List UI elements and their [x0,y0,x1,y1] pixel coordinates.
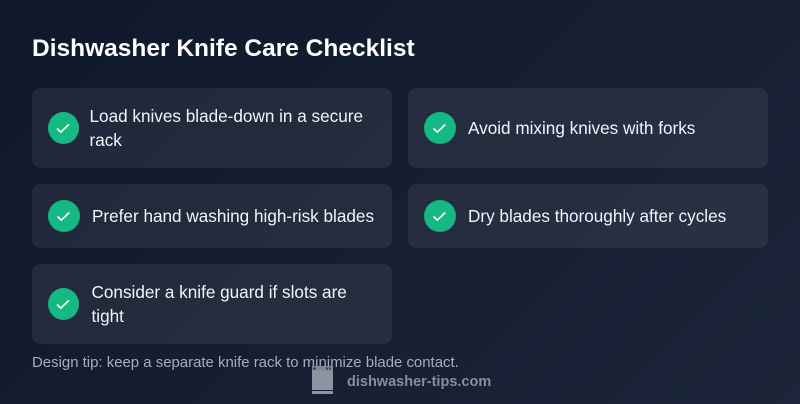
text: Avoid mixing knives with forks [468,118,695,138]
text [90,106,363,150]
panel: knife guard [32,264,392,344]
panel: hand washing [32,184,392,248]
design tip: Design tip: keep a separate knife rack to minimize blade contact. [32,354,459,370]
icon: check [48,200,80,232]
panel: dry blades [408,184,768,248]
text: Load knives blade-down in a secure [90,106,363,126]
text: tight [92,306,124,326]
text [92,282,347,326]
text: Prefer hand washing high-risk blades [92,206,374,226]
text: Consider a knife guard if slots are [92,282,347,302]
icon: check [48,288,79,320]
icon: dishwasher [312,366,333,394]
panel: load knives [32,88,392,168]
icon: check [48,112,79,144]
watermark: dishwasher-tips.com [347,374,491,390]
text: Dry blades thoroughly after cycles [468,206,726,226]
text: rack [90,130,122,150]
icon: check [424,200,456,232]
title: Dishwasher Knife Care Checklist [32,35,415,62]
icon: check [424,112,456,144]
panel: avoid mixing [408,88,768,168]
